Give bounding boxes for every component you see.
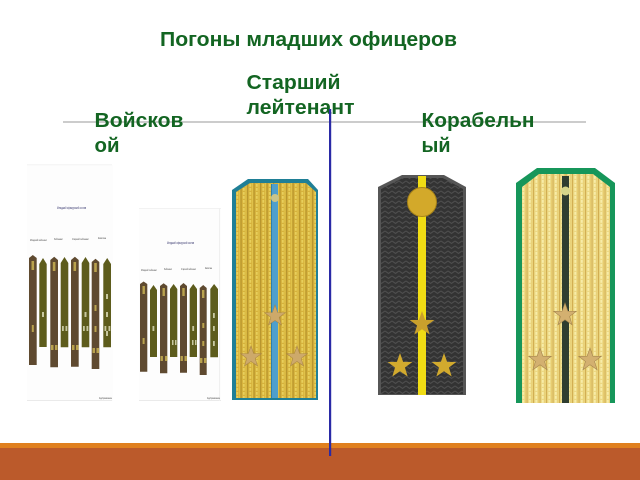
left star: [529, 348, 551, 370]
button on board: [408, 188, 436, 216]
right star: [432, 353, 456, 377]
panel: rank chart small: Лейтенант: [164, 267, 172, 271]
heading: senior lieutenant: Старший: [246, 72, 340, 94]
icon: border guard shoulder board: [516, 168, 615, 403]
panel: rank chart large: Капитан: [98, 236, 106, 240]
heading: army: ой: [94, 135, 120, 157]
vertical divider line: [329, 109, 331, 456]
panel: rank chart small: [139, 208, 221, 401]
icon: naval black shoulder board: [378, 175, 466, 395]
footer band: [0, 443, 640, 480]
centre star: [265, 305, 285, 325]
panel: rank chart small: Младший офицерский состав: [167, 240, 194, 245]
panel: rank chart large: Младший офицерский состав: [57, 205, 86, 210]
panel: rank chart small: Капитан: [205, 266, 212, 270]
horizontal divider line: [63, 121, 586, 123]
button on board: [271, 194, 279, 202]
panel: rank chart large: Лейтенант: [54, 237, 63, 241]
title: Погоны младших офицеров: [160, 29, 457, 51]
heading: senior lieutenant: лейтенант: [246, 97, 355, 119]
heading: naval: Корабельн: [422, 110, 534, 132]
left star: [388, 353, 412, 377]
panel: rank chart small: Младший лейтенант: [141, 268, 157, 272]
centre star: [554, 303, 576, 325]
right star: [579, 348, 601, 370]
panel: rank chart large: Код/примечание: [99, 396, 112, 400]
icon: air force shoulder board: [232, 179, 318, 400]
panel: rank chart small: Старший лейтенант: [181, 267, 196, 271]
panel: rank chart large: Старший лейтенант: [72, 237, 89, 241]
panel: rank chart large: [27, 164, 113, 401]
panel: rank chart large: Младший лейтенант: [30, 238, 47, 242]
panel: rank chart small: Код/примечание: [207, 396, 220, 400]
left star: [241, 346, 261, 366]
centre star: [410, 311, 434, 335]
right star: [287, 346, 307, 366]
button on board: [561, 186, 570, 196]
heading: naval: ый: [422, 135, 450, 157]
heading: army: Войсков: [94, 110, 184, 132]
